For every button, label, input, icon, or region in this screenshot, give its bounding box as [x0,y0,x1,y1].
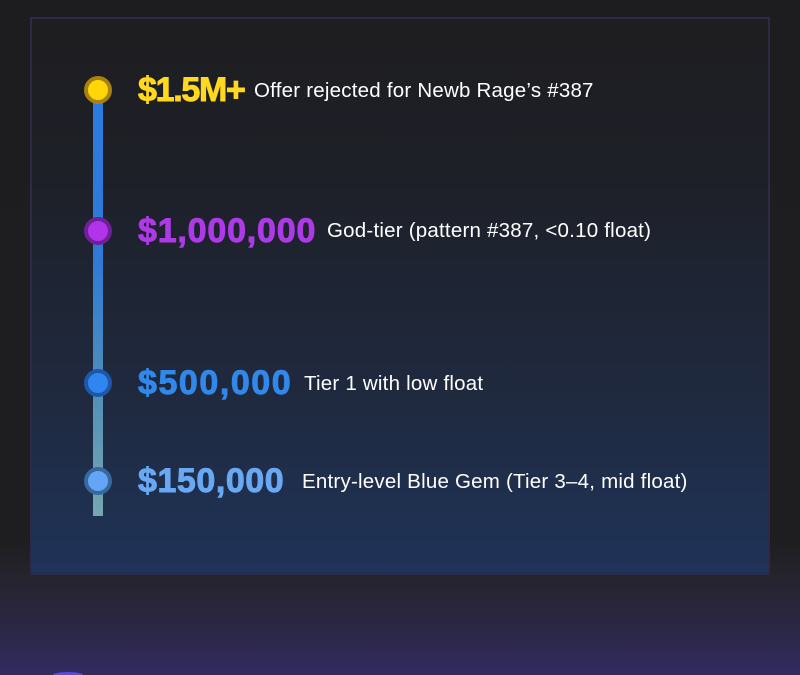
marker: $1.5M+ [84,76,112,104]
amount: $1.5M+: $1.5M+ [138,71,245,109]
description: $500,000: Tier 1 with low float [304,372,483,395]
description: $1.5M+: Offer rejected for Newb Rage’s #387 [254,79,594,102]
panel: price timeline [30,17,770,575]
marker: $500,000 [84,369,112,397]
marker: $1,000,000 [84,217,112,245]
next section marker, cropped [53,672,83,675]
description: $1,000,000: God-tier (pattern #387, <0.10 float) [327,219,651,242]
amount: $500,000: $500,000 [138,364,292,402]
description: $150,000: Entry-level Blue Gem (Tier 3–4, mid float) [302,470,688,493]
amount: $1,000,000: $1,000,000 [138,212,316,250]
amount: $150,000: $150,000 [138,462,284,500]
marker: $150,000 [84,467,112,495]
timeline bar [93,90,103,516]
